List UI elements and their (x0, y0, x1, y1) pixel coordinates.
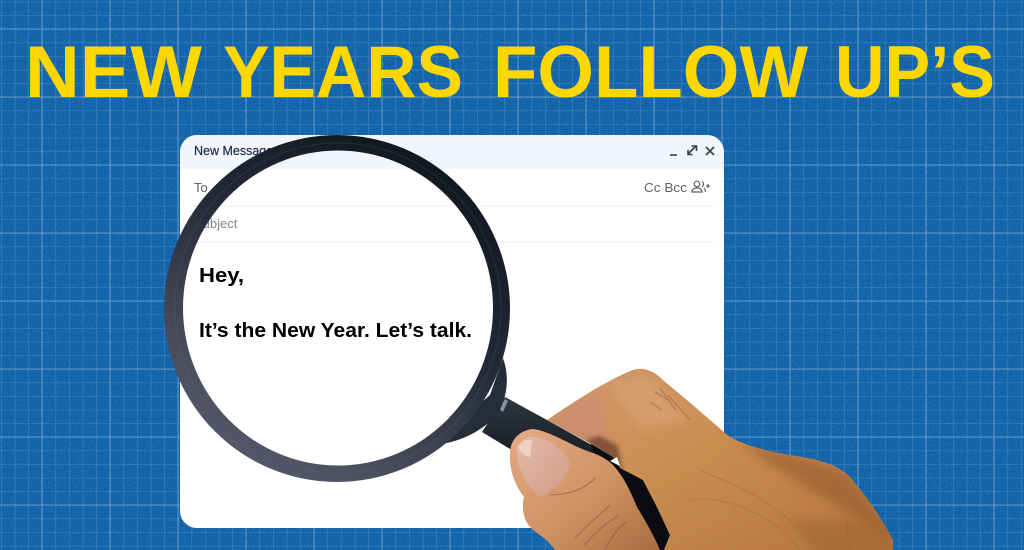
gap showing window (610, 457, 620, 466)
shadow behind knuckle (746, 444, 882, 524)
subject field: Subject (194, 216, 238, 231)
title: UP’S (835, 32, 995, 113)
handle dark section (590, 442, 670, 550)
panel: email compose window (180, 135, 724, 528)
title (25, 32, 995, 113)
finger hair patch (650, 388, 690, 420)
skin creases (690, 470, 850, 550)
thumb (510, 429, 660, 550)
lens inner ring highlight (175, 143, 501, 473)
lens collar (438, 358, 507, 443)
magnified email text: It’s the New Year. Let’s talk. (199, 319, 472, 342)
window header bar (180, 135, 724, 169)
magnifying glass (164, 135, 670, 550)
magnified email text (199, 264, 472, 342)
palm shadow near the bottom (790, 520, 893, 550)
hand holding magnifier (510, 369, 893, 550)
handle (482, 397, 613, 460)
nail highlight (518, 440, 532, 457)
fingertip pink tone (552, 400, 607, 454)
hand back and fingers (547, 369, 893, 550)
to field: To (194, 180, 208, 195)
title: NEW (25, 32, 202, 113)
lens rim (164, 135, 510, 482)
thumbnail (517, 437, 570, 497)
knuckle highlight (618, 382, 684, 428)
field divider lines (194, 206, 714, 242)
window controls (670, 146, 714, 155)
magnified email text: Hey, (199, 264, 244, 287)
title: FOLLOW (493, 32, 808, 113)
title: YEARS (223, 32, 463, 113)
thumb creases (550, 478, 626, 550)
cc and bcc links: Cc Bcc (644, 180, 688, 195)
header label: new message: New Message (194, 144, 273, 158)
hand shading (547, 378, 893, 550)
under-finger shadow (585, 436, 622, 470)
handle highlight (499, 399, 508, 412)
icon: add people (692, 181, 710, 192)
